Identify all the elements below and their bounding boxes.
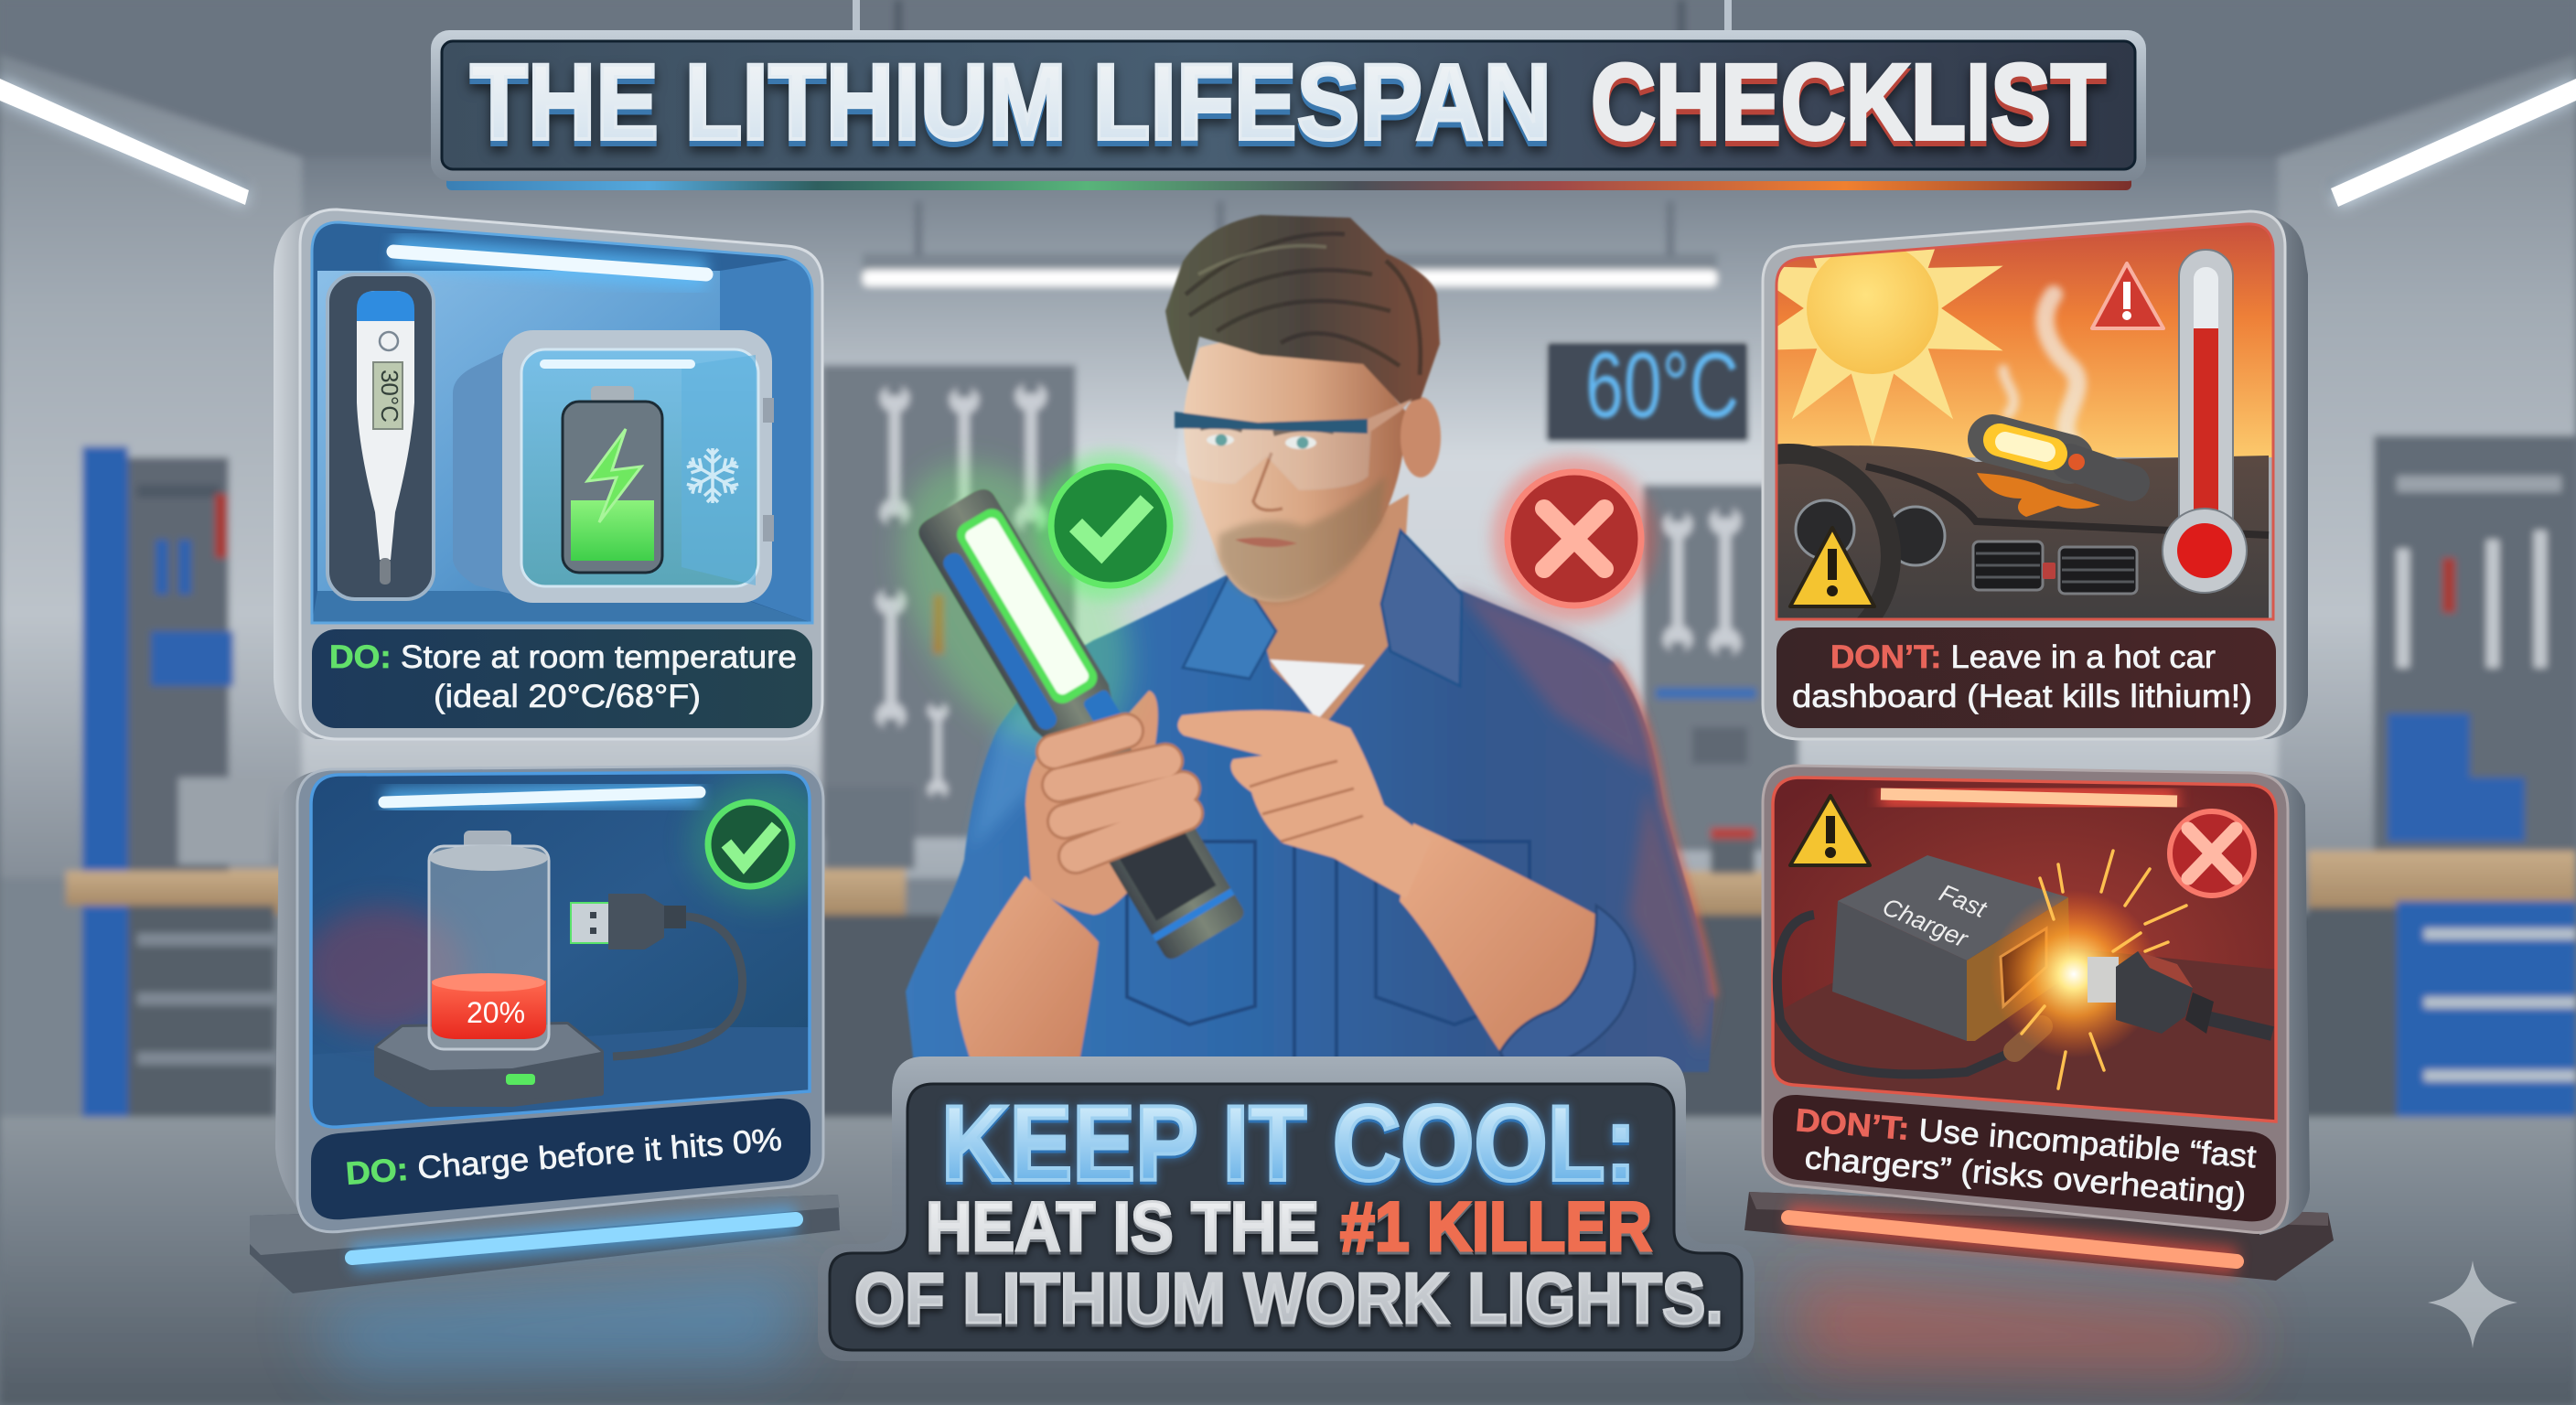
sparks bbox=[1990, 851, 2186, 1089]
stand bbox=[1744, 1192, 2334, 1281]
watermark sparkle bbox=[2428, 1260, 2517, 1348]
bottom message sign bbox=[818, 1056, 1755, 1361]
icon: green check bbox=[708, 802, 792, 886]
stand bbox=[250, 1195, 840, 1293]
melting flashlight bbox=[1992, 439, 2131, 483]
snowflake bbox=[685, 448, 740, 503]
panel: DON'T incompatible fast chargers bbox=[1744, 766, 2334, 1281]
caption bbox=[312, 629, 812, 728]
hair bbox=[1165, 215, 1440, 404]
shirt bbox=[906, 531, 1714, 1072]
scene bbox=[313, 774, 809, 1125]
battery: 20% bbox=[429, 831, 549, 1049]
neck bbox=[1250, 494, 1409, 723]
hot thermometer bbox=[2163, 250, 2247, 593]
title text: CHECKLIST bbox=[1591, 42, 2106, 163]
collar bbox=[1183, 531, 1462, 686]
USB cable bbox=[571, 894, 743, 1056]
mouth bbox=[1235, 538, 1297, 547]
caption: dashboard (Heat kills lithium!) bbox=[1792, 679, 2252, 714]
work light bbox=[853, 423, 1294, 986]
smoke bbox=[2003, 295, 2077, 445]
melted puddle bbox=[1977, 473, 2100, 517]
icon: green check bbox=[1036, 451, 1186, 601]
technician holding work light bbox=[853, 215, 1714, 1072]
wall display: 60 degrees bbox=[1546, 333, 1749, 442]
right sleeve cuff bbox=[1500, 906, 1635, 1072]
icon: red cross bbox=[1492, 456, 1657, 621]
safety glasses bbox=[1175, 399, 1412, 489]
ceiling light left bbox=[0, 77, 249, 207]
undershirt bbox=[1270, 660, 1365, 720]
colour strip bbox=[446, 174, 2131, 190]
charger label: Charger bbox=[1879, 893, 1972, 953]
eyes bbox=[1200, 425, 1334, 449]
charger label: Fast bbox=[1936, 879, 1991, 924]
left finger highlights bbox=[1054, 731, 1186, 856]
warning triangle bbox=[1790, 528, 1874, 606]
caption bbox=[311, 1099, 810, 1219]
title sign bbox=[431, 0, 2146, 190]
subhead line 2: OF LITHIUM WORK LIGHTS. bbox=[854, 1258, 1723, 1338]
panel: DO store at room temperature bbox=[274, 209, 822, 739]
panel: DO charge before 0% bbox=[250, 766, 840, 1293]
left palm bbox=[1025, 691, 1188, 915]
right forearm bbox=[1400, 823, 1596, 1052]
thermometer bbox=[327, 274, 434, 599]
left forearm bbox=[956, 876, 1099, 1072]
sun bbox=[1778, 249, 2003, 445]
panel: DON'T leave in a hot car bbox=[1686, 171, 2308, 739]
red alert triangle bbox=[2092, 263, 2163, 328]
dashboard bbox=[1775, 445, 2269, 622]
charger label bbox=[1879, 879, 1991, 953]
power button bbox=[1082, 688, 1124, 734]
wall display: 60 degrees: 60°C bbox=[1585, 333, 1739, 437]
subhead line 1: #1 KILLER bbox=[1340, 1188, 1652, 1266]
warning triangle bbox=[1790, 796, 1870, 865]
mini fridge bbox=[453, 330, 774, 603]
desk reflections bbox=[311, 1271, 2250, 1372]
subhead line 1: HEAT IS THE bbox=[926, 1188, 1319, 1266]
caption bbox=[1776, 627, 2276, 728]
caption: DON’T: Leave in a hot car bbox=[1830, 639, 2216, 675]
blue grip bbox=[940, 550, 1060, 733]
warm rim light bbox=[1614, 662, 1714, 997]
scene bbox=[1770, 773, 2278, 1125]
ceiling light bbox=[393, 252, 706, 274]
subhead line 1 bbox=[926, 1188, 1652, 1266]
scene bbox=[1778, 225, 2272, 618]
caption: DO: Store at room temperature bbox=[329, 639, 797, 675]
plug bbox=[2088, 951, 2272, 1034]
ceiling light right bbox=[2331, 77, 2576, 209]
headline: KEEP IT COOL: bbox=[941, 1083, 1637, 1203]
icon: red cross bbox=[2170, 811, 2254, 896]
caption: chargers” (risks overheating) bbox=[1803, 1140, 2248, 1212]
battery: 20%: 20% bbox=[467, 996, 525, 1029]
thermometer: 30°C bbox=[376, 370, 403, 423]
glowing lens bbox=[952, 504, 1101, 708]
battery bbox=[563, 386, 662, 573]
right pointing hand bbox=[1177, 710, 1432, 898]
nose bbox=[1253, 453, 1283, 510]
title text: THE LITHIUM LIFESPAN bbox=[470, 42, 1551, 163]
caption: DON’T: Use incompatible “fast bbox=[1794, 1102, 2258, 1174]
left fingers bbox=[1054, 731, 1186, 856]
ceiling light bbox=[384, 792, 700, 802]
caption: (ideal 20°C/68°F) bbox=[434, 679, 701, 714]
fast charger bbox=[1777, 855, 2070, 1074]
charging dock bbox=[377, 1024, 601, 1104]
caption bbox=[1773, 1095, 2276, 1221]
ceiling light bbox=[1881, 794, 2177, 801]
caption: DO: Charge before it hits 0% bbox=[345, 1121, 783, 1192]
face bbox=[1184, 340, 1441, 602]
scene bbox=[312, 220, 815, 627]
